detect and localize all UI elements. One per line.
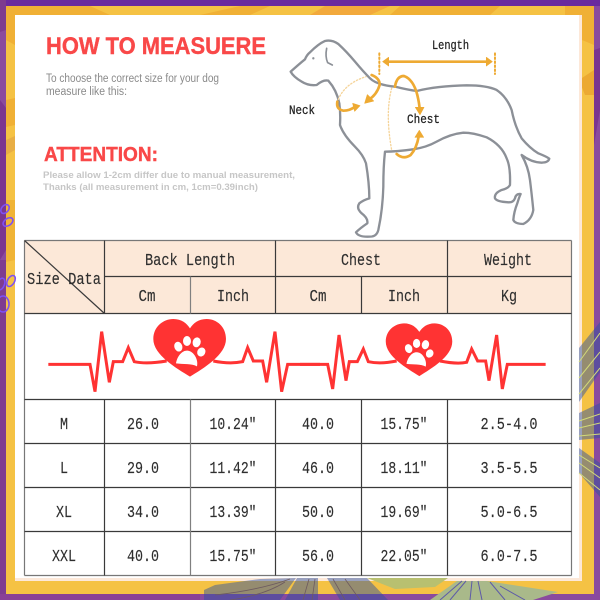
heartbeat line left xyxy=(48,332,320,392)
row: L: 29.0 xyxy=(127,460,159,479)
attention text: Please allow 1-2cm differ due to manual measurement, xyxy=(43,170,295,181)
row: M: M xyxy=(60,416,68,435)
row: M: 26.0 xyxy=(127,416,159,435)
dog outline xyxy=(291,41,549,237)
title: HOW TO MEASUERE xyxy=(46,33,266,60)
icon: heart with paw 2 xyxy=(386,323,452,376)
row: XL: 5.0-6.5 xyxy=(480,504,538,523)
heartbeat banner with paw hearts xyxy=(48,319,546,392)
row: XXL: 56.0 xyxy=(302,548,334,567)
dog measurement diagram xyxy=(289,38,549,237)
header labels: Inch xyxy=(217,288,249,307)
row: XXL: XXL xyxy=(52,548,76,567)
intro text: measure like this: xyxy=(46,86,127,98)
table grid xyxy=(24,240,572,576)
attention heading: ATTENTION: xyxy=(44,144,158,166)
row: XXL xyxy=(52,548,538,567)
header labels: Inch xyxy=(388,288,420,307)
row: XXL: 15.75″ xyxy=(210,548,256,567)
row: XXL: 22.05″ xyxy=(380,548,428,567)
row: M xyxy=(60,416,538,435)
decoration: squiggles xyxy=(0,203,17,312)
header labels: Size Data xyxy=(27,271,101,290)
header labels: Cm xyxy=(138,288,156,307)
decoration: right feathers xyxy=(579,322,600,497)
row: XL: 34.0 xyxy=(127,504,159,523)
row: L: L xyxy=(60,460,68,479)
row: M: 40.0 xyxy=(302,416,334,435)
label: neck: Neck xyxy=(289,103,315,118)
row: XL xyxy=(56,504,538,523)
row: M: 10.24″ xyxy=(210,416,256,435)
row: L: 18.11″ xyxy=(380,460,428,479)
row: XXL: 6.0-7.5 xyxy=(480,548,538,567)
header labels: Kg xyxy=(501,288,517,307)
label: length: Length xyxy=(432,38,469,53)
row: L xyxy=(60,460,538,479)
label: chest: Chest xyxy=(407,112,440,127)
row: XL: XL xyxy=(56,504,72,523)
row: L: 3.5-5.5 xyxy=(480,460,538,479)
attention text xyxy=(43,170,295,193)
row: M: 2.5-4.0 xyxy=(480,416,538,435)
row: XL: 19.69″ xyxy=(380,504,428,523)
header labels: Cm xyxy=(310,288,326,307)
intro text: To choose the correct size for your dog xyxy=(46,73,219,85)
decoration: bottom feathers xyxy=(204,578,558,600)
header labels: Chest xyxy=(341,252,381,271)
header labels xyxy=(27,252,532,307)
table header background xyxy=(24,240,571,313)
header labels: Back Length xyxy=(145,252,235,271)
attention text: Thanks (all measurement in cm, 1cm=0.39inch) xyxy=(43,182,258,193)
icon: heart with paw 1 xyxy=(153,319,226,377)
intro text xyxy=(46,73,219,98)
row: XXL: 40.0 xyxy=(127,548,159,567)
row: XL: 13.39″ xyxy=(210,504,256,523)
measurement arrows xyxy=(337,53,495,157)
row: L: 11.42″ xyxy=(210,460,256,479)
size table xyxy=(24,240,572,576)
row: M: 15.75″ xyxy=(380,416,428,435)
row: XL: 50.0 xyxy=(302,504,334,523)
header labels: Weight xyxy=(484,252,532,271)
row: L: 46.0 xyxy=(302,460,334,479)
heartbeat line right xyxy=(300,335,546,389)
